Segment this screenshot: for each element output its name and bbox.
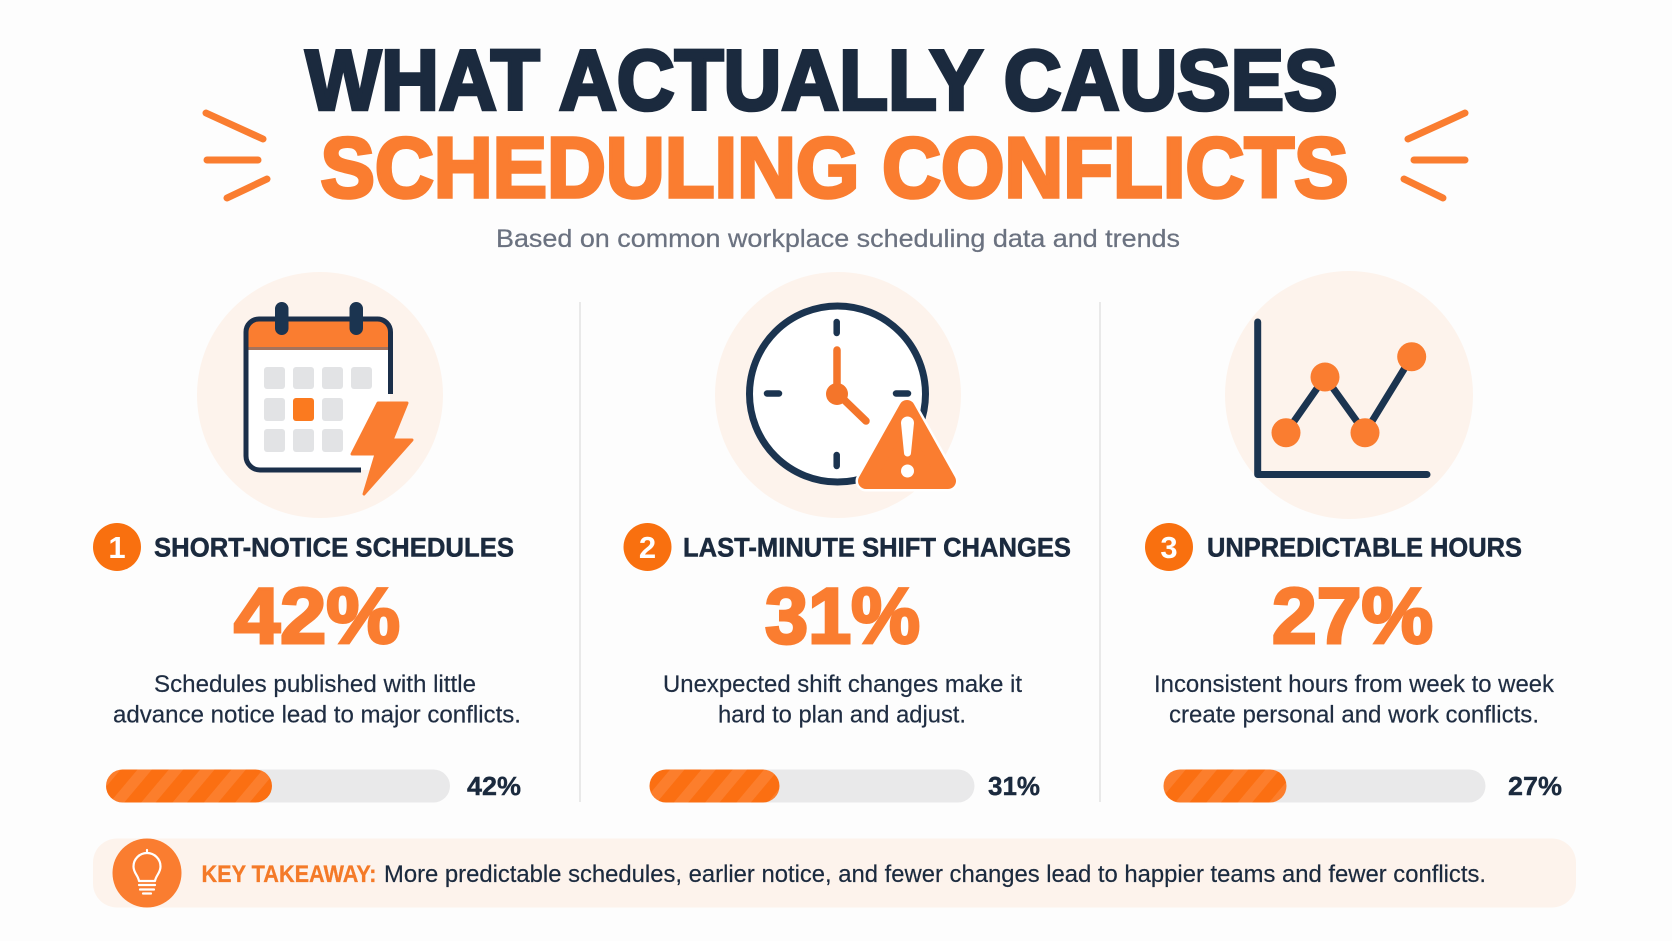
- heading: short-notice schedules: SHORT-NOTICE SCHEDULES: [154, 532, 514, 562]
- title: WHAT ACTUALLY CAUSES: [306, 34, 1338, 128]
- number badge 1: 1: [108, 530, 126, 565]
- description: [1154, 671, 1555, 728]
- icon: clock with warning triangle: [715, 272, 961, 518]
- icon: left burst rays: [206, 113, 267, 198]
- description: Inconsistent hours from week to week: [1154, 671, 1555, 698]
- description: Schedules published with little: [154, 671, 476, 698]
- number badge 2: 2: [639, 530, 656, 565]
- panel: last-minute shift changes: [624, 272, 1071, 802]
- progress bar 27%: [1164, 770, 1562, 802]
- takeaway text: More predictable schedules, earlier notice, and fewer changes lead to happier teams and fewer conflicts.: [384, 861, 1486, 888]
- progress bar 31%: [650, 770, 1040, 802]
- icon: calendar with lightning bolt: [197, 272, 443, 518]
- heading: unpredictable hours: UNPREDICTABLE HOURS: [1207, 532, 1522, 562]
- takeaway label: KEY TAKEAWAY:: [202, 861, 376, 888]
- number badge 1: [93, 523, 141, 571]
- progress bar 42%: 42%: [467, 771, 521, 801]
- icon: line chart: [1225, 271, 1473, 519]
- callout: key takeaway: [93, 838, 1576, 908]
- panel: short-notice schedules: [93, 272, 521, 802]
- description: hard to plan and adjust.: [718, 702, 966, 728]
- icon: right burst rays: [1404, 113, 1465, 198]
- stat: 42%: 42%: [234, 571, 400, 660]
- panel: unpredictable hours: [1145, 271, 1562, 802]
- number badge 3: [1145, 523, 1193, 571]
- description: [663, 671, 1022, 728]
- description: [113, 671, 521, 728]
- progress bar 27%: 27%: [1508, 771, 1562, 801]
- number badge 3: 3: [1160, 530, 1178, 565]
- icon: light bulb: [112, 838, 182, 908]
- title: SCHEDULING CONFLICTS: [320, 121, 1348, 216]
- number badge 2: [624, 523, 672, 571]
- title: [306, 34, 1348, 216]
- stat: 27%: 27%: [1272, 571, 1433, 660]
- progress bar 42%: [106, 770, 521, 802]
- description: advance notice lead to major conflicts.: [113, 702, 521, 728]
- description: create personal and work conflicts.: [1169, 702, 1539, 728]
- description: Unexpected shift changes make it: [663, 671, 1022, 698]
- subtitle: Based on common workplace scheduling data and trends: [496, 225, 1180, 253]
- heading: last-minute shift changes: LAST-MINUTE SHIFT CHANGES: [683, 532, 1071, 562]
- progress bar 31%: 31%: [988, 771, 1040, 801]
- stat: 31%: 31%: [765, 571, 920, 660]
